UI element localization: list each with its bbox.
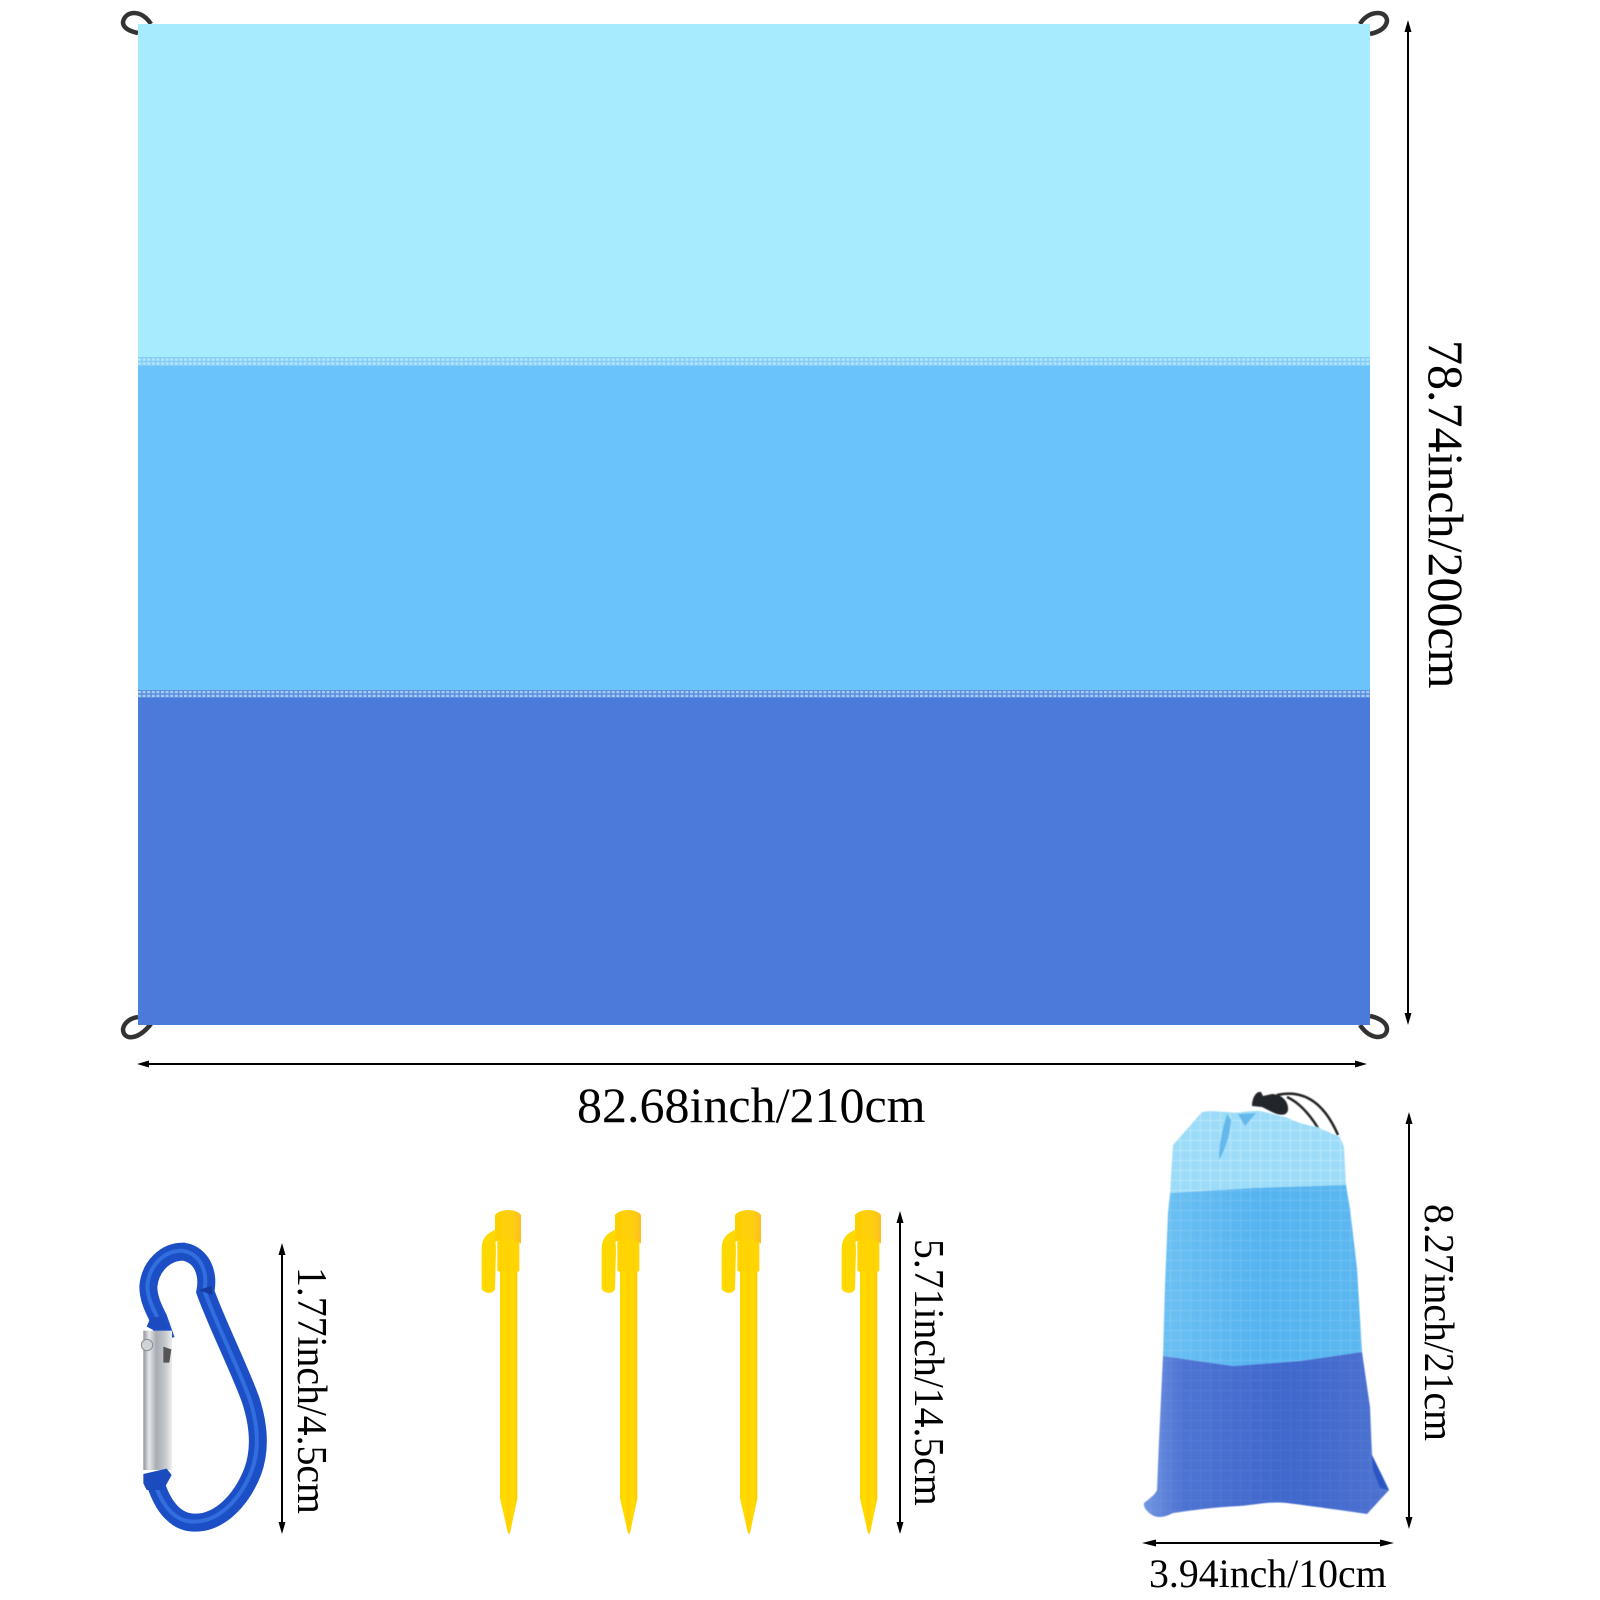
carabiner gate <box>143 1331 172 1470</box>
label: stake height: 5.71inch/14.5cm <box>906 1239 952 1506</box>
carabiner rivet <box>141 1339 153 1351</box>
label: bag width: 3.94inch/10cm <box>1149 1552 1387 1596</box>
arrow: stake height <box>896 1211 904 1534</box>
mat band: dark blue <box>138 692 1370 1025</box>
carabiner lower joint <box>143 1469 172 1490</box>
seam: lower <box>138 690 1370 698</box>
corner loop: bottom right <box>1360 1016 1387 1037</box>
seam: upper <box>138 357 1370 366</box>
tent stake 2 <box>602 1210 641 1533</box>
corner loop: bottom left <box>123 1017 151 1037</box>
carabiner <box>141 1251 258 1523</box>
tent stake 4 <box>842 1210 881 1533</box>
label: mat width: 82.68inch/210cm <box>577 1077 926 1133</box>
bag top panel <box>1170 1111 1346 1193</box>
arrow: bag height <box>1406 1112 1412 1529</box>
carabiner knee notch <box>198 1286 213 1295</box>
arrow: mat height <box>1404 20 1412 1025</box>
carabiner upper joint <box>147 1317 168 1330</box>
bag side shadow <box>1372 1455 1389 1490</box>
label: mat height: 78.74inch/200cm <box>1418 340 1474 689</box>
bag cord <box>1277 1094 1338 1135</box>
mat band: light blue <box>138 24 1370 358</box>
tent stake 1 <box>482 1210 521 1533</box>
corner loop: top left <box>123 13 151 33</box>
storage bag <box>1144 1092 1389 1517</box>
bag middle panel <box>1163 1185 1362 1366</box>
tent stake 3 <box>722 1210 761 1533</box>
bag toggle <box>1252 1092 1288 1115</box>
mat band: medium blue <box>138 358 1370 692</box>
arrow: mat width <box>137 1060 1367 1068</box>
carabiner gate slot <box>163 1347 171 1363</box>
beach mat <box>138 24 1370 1025</box>
bag fold <box>1219 1113 1256 1160</box>
arrow: carabiner height <box>278 1243 286 1534</box>
corner loop: top right <box>1360 13 1387 34</box>
label: carabiner height: 1.77inch/4.5cm <box>289 1267 335 1514</box>
bag bottom panel <box>1144 1352 1389 1517</box>
arrow: bag width <box>1142 1540 1394 1546</box>
label: bag height: 8.27inch/21cm <box>1416 1204 1462 1441</box>
